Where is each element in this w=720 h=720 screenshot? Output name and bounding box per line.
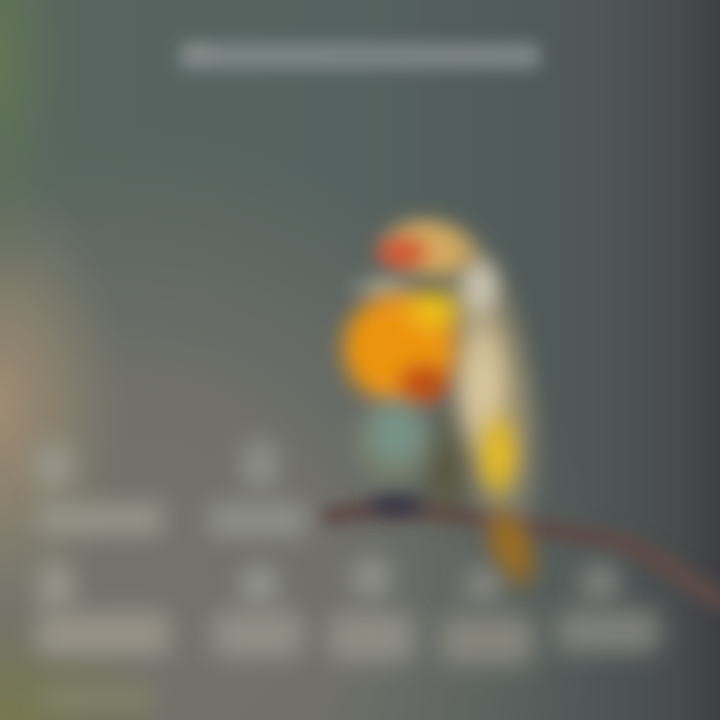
bird: red face bbox=[368, 230, 436, 276]
bird: belly surround bbox=[343, 388, 443, 496]
bird: pale teal belly bbox=[360, 392, 432, 472]
bird: head bbox=[370, 205, 490, 291]
bird: yellow shoulder bbox=[396, 280, 472, 340]
bird: dark flank bbox=[411, 404, 479, 536]
bird: cream wing panel bbox=[453, 305, 513, 465]
bird: orange breast bbox=[332, 282, 468, 414]
item: row 2, column 3 bbox=[328, 557, 414, 662]
bird: yellow tail bbox=[471, 403, 525, 507]
footer text (illegible, blurred) bbox=[42, 688, 154, 708]
item: row 2, column 2 bbox=[212, 565, 304, 658]
branch bbox=[330, 509, 720, 600]
bird: white nape bbox=[454, 249, 506, 325]
bird: red lower breast bbox=[390, 356, 458, 412]
title (illegible, blurred) bbox=[172, 30, 540, 74]
bird: upper throat bbox=[343, 270, 427, 306]
icon grid (blurred labels and icons) bbox=[34, 439, 660, 665]
item: row 2, column 4 bbox=[440, 566, 534, 665]
item: row 2, column 1 bbox=[36, 560, 170, 656]
item: row 2, column 5 bbox=[556, 562, 660, 653]
item: row 1, column 1 bbox=[34, 442, 164, 535]
item: row 1, column 2 bbox=[208, 439, 308, 537]
bird bbox=[332, 205, 564, 605]
bird: dark feet bbox=[358, 485, 434, 523]
bird: tail tip bbox=[468, 491, 554, 605]
bird: dusky back and wing bbox=[416, 219, 564, 561]
